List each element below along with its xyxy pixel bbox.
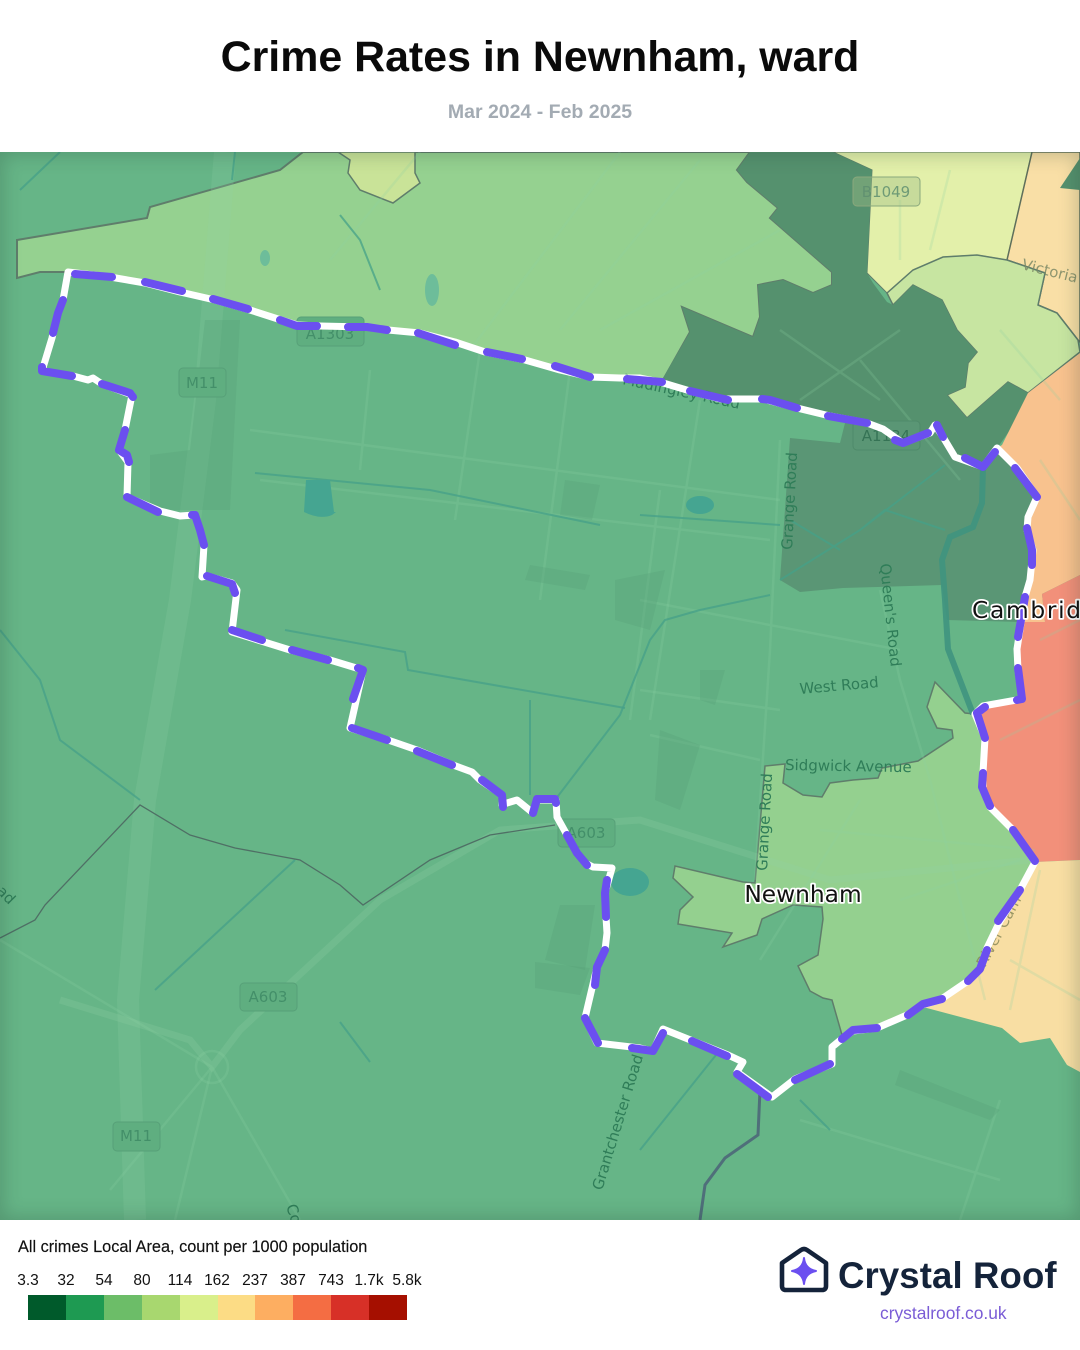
legend: scale labels: 237 <box>242 1272 268 1289</box>
road shield: M11 north: M11 <box>186 374 218 392</box>
region: dark corner top right <box>1060 158 1080 190</box>
legend: scale labels: 3.3 <box>17 1272 39 1289</box>
legend: scale labels: 32 <box>57 1272 75 1289</box>
label: Grange Road south: Grange Road <box>753 773 776 871</box>
legend: scale labels: 387 <box>280 1272 306 1289</box>
region: north-west light green <box>17 152 832 380</box>
road shield: M11 south: M11 <box>120 1127 152 1145</box>
brand URL: crystalroof.co.uk <box>880 1303 1007 1323</box>
region: salmon central Cambridge <box>975 575 1080 862</box>
road shield: M11 north <box>179 368 226 397</box>
legend: scale labels: 743 <box>318 1272 344 1289</box>
road shield: A603 south <box>240 983 297 1011</box>
road shield: A603 central <box>558 819 615 847</box>
parish boundary line <box>0 805 555 938</box>
road shield: B1049: B1049 <box>862 183 910 201</box>
region: small yellow-green island <box>338 152 420 203</box>
subtitle: date range: Mar 2024 - Feb 2025 <box>448 101 632 123</box>
road shield: A603 central: A603 <box>567 824 605 842</box>
legend: colour scale bar <box>28 1295 407 1320</box>
road shield: A603 south: A603 <box>249 988 287 1006</box>
brand name: Crystal Roof <box>838 1255 1057 1296</box>
legend title: All crimes Local Area, count per 1000 population <box>18 1238 367 1256</box>
road shield: A1303 <box>297 317 364 346</box>
panel: choropleth map <box>0 152 1080 1220</box>
region: dark green colleges <box>780 423 1037 622</box>
legend: scale labels: 162 <box>204 1272 230 1289</box>
road shield: B1049 <box>853 177 920 206</box>
title: Crime Rates in Newnham, ward <box>221 33 859 81</box>
label: Victoria: Victoria <box>1020 255 1080 287</box>
legend: scale labels: 5.8k <box>392 1272 422 1289</box>
ponds <box>260 250 714 896</box>
label: Madingley Road: Madingley Road <box>621 370 742 413</box>
label: West Road: West Road <box>799 673 879 698</box>
region: orange east <box>997 353 1080 622</box>
label: Grange Road north: Grange Road <box>778 452 801 550</box>
label: Grantchester Road: Grantchester Road <box>589 1052 647 1192</box>
region: dark green city centre north <box>660 152 1028 467</box>
region: peach south-east <box>923 860 1080 1072</box>
road shield: A1134: A1134 <box>862 427 910 445</box>
river Cam southern reach <box>700 1090 760 1220</box>
road network <box>0 152 1080 1220</box>
region: light green north-east <box>887 255 1080 418</box>
region: peach north-east <box>1007 152 1080 342</box>
legend: scale labels: 114 <box>168 1272 192 1289</box>
place label: Newnham: Newnham <box>744 881 862 908</box>
legend: scale labels: 80 <box>133 1272 151 1289</box>
road shield: M11 south <box>113 1122 160 1151</box>
region: pale yellow north <box>833 152 1032 293</box>
label: Queen's Road: Queen's Road <box>876 563 905 667</box>
region: Newnham light green <box>673 682 1035 1035</box>
icon: Crystal Roof house logo <box>780 1246 828 1292</box>
road shield: A1303: A1303 <box>306 325 354 343</box>
ward boundary: Newnham <box>42 272 1037 1097</box>
legend: scale labels: 54 <box>95 1272 113 1289</box>
label: River Cam: River Cam <box>973 893 1025 970</box>
label: Sidgwick Avenue: Sidgwick Avenue <box>785 756 912 776</box>
legend: scale labels <box>17 1272 422 1289</box>
road shield: A1134 <box>853 421 920 450</box>
darker field patches <box>150 320 1000 1120</box>
base area: low crime green <box>0 152 1080 1220</box>
rivers and ponds <box>0 152 983 1150</box>
map edge vignette <box>0 152 1080 1220</box>
legend: scale labels: 1.7k <box>354 1272 384 1289</box>
